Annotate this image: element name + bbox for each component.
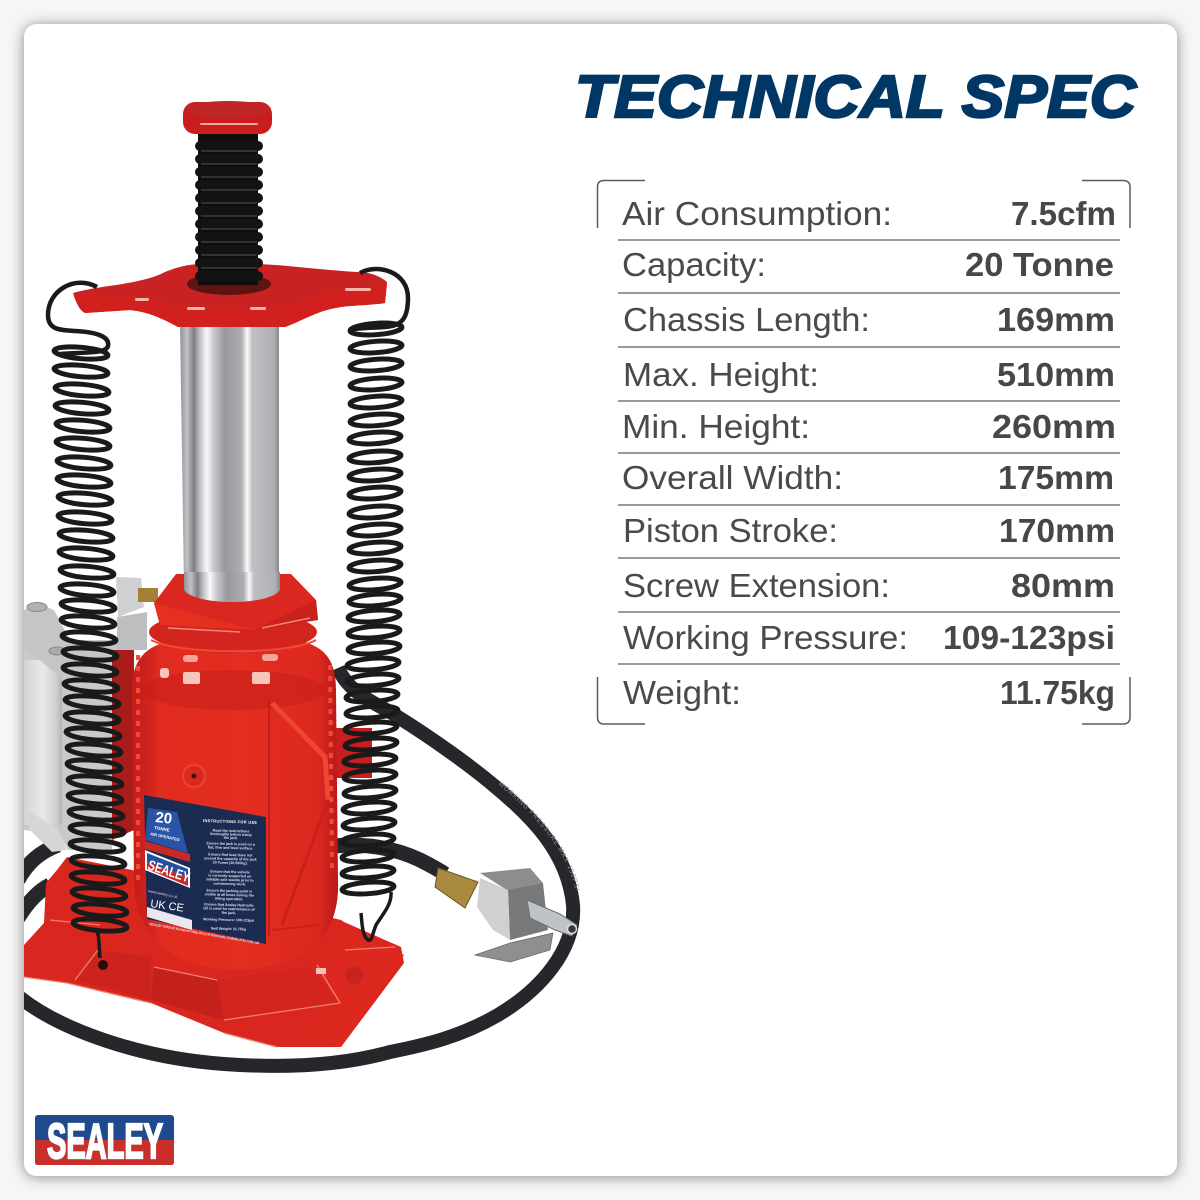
label instructions text: suitable axle stands prior to <box>206 877 254 883</box>
row: capacity <box>622 246 1114 283</box>
jack bottle body <box>132 640 338 970</box>
label instructions text: thoroughly before using <box>210 832 252 837</box>
release valve <box>183 765 205 787</box>
row: min height <box>622 408 1116 445</box>
row: max height: 510mm <box>997 356 1115 393</box>
label instructions text: the jack. <box>222 911 236 915</box>
air trigger valve <box>475 868 577 962</box>
row: overall width: Overall Width: <box>622 459 843 496</box>
label instructions text: Nett Weight: 11.75kg <box>211 927 246 931</box>
red top cap <box>183 101 272 134</box>
bottle neck collar <box>149 572 318 653</box>
row: air consumption: Air Consumption: <box>622 195 892 232</box>
title: TECHNICAL SPEC <box>575 64 1138 130</box>
label instructions text: Working Pressure: 109-123psi <box>203 917 254 923</box>
product photo: air bottle jack: WORKING PRESSURE MAX 150PSI <box>499 780 580 890</box>
row: chassis length: 169mm <box>997 301 1115 338</box>
chrome piston shaft <box>180 327 279 574</box>
table corner brackets <box>598 180 1130 724</box>
label instructions text: visible at all times during the <box>205 892 254 898</box>
jack base plate <box>24 857 404 1047</box>
bottle highlights <box>160 654 278 684</box>
label instructions text: the jack. <box>224 836 238 840</box>
label instructions text: Oil is used for maintenance of <box>203 906 255 912</box>
label instructions text: Read the instructions <box>213 829 249 833</box>
label instructions text: flat, firm and level surface. <box>208 845 253 851</box>
air hose inner loop <box>18 845 445 918</box>
row: piston stroke: 170mm <box>999 512 1115 549</box>
label instructions text: 20 Tonne (20,000kg). <box>213 861 248 865</box>
label instructions text: Ensure the jack is used on a <box>206 841 256 847</box>
row: capacity: Capacity: <box>622 246 766 283</box>
row: screw extension: Screw Extension: <box>623 567 890 604</box>
row: working pressure: 109-123psi <box>943 619 1115 656</box>
product label: UK CE <box>150 898 185 915</box>
yoke saddle <box>73 264 387 327</box>
product label: INSTRUCTIONS FOR USE <box>203 818 257 825</box>
red side tab <box>335 728 372 778</box>
row: weight <box>623 674 1115 711</box>
sealey logo: SEALEY <box>47 1115 163 1169</box>
bottle weld beads <box>138 655 332 935</box>
label instructions text <box>202 828 258 932</box>
product label: TONNE <box>154 825 170 833</box>
row dividers <box>618 240 1120 664</box>
row: chassis length: Chassis Length: <box>623 301 870 338</box>
label instructions text: Ensure the jacking point is <box>207 888 252 894</box>
product label: SEALEY <box>146 857 192 885</box>
right air coil <box>342 269 408 940</box>
row: weight: Weight: <box>623 674 741 711</box>
row: piston stroke: Piston Stroke: <box>623 512 838 549</box>
air motor cylinder <box>24 577 158 852</box>
product label: www.sealey.co.uk <box>148 889 178 899</box>
row: max height <box>623 356 1115 393</box>
sealey logo <box>35 1115 174 1169</box>
label instructions text: Ensure that Sealey Hydraulic <box>204 902 254 908</box>
label instructions text: is correctly supported on <box>208 873 251 879</box>
product label: AIR OPERATED <box>150 831 180 842</box>
threaded screw <box>195 133 263 285</box>
row: working pressure: Working Pressure: <box>623 619 908 656</box>
spec table <box>598 180 1130 724</box>
product label <box>144 795 266 946</box>
brass hose fitting <box>435 868 478 908</box>
row: screw extension: 80mm <box>1011 567 1115 604</box>
product label: SEALEY GROUP, Kempson Way, Bury St Edmunds, Suffolk, IP32 7AR, UK <box>149 922 260 946</box>
label instructions text: commencing work. <box>213 882 246 886</box>
label instructions text: Ensure that load does not <box>208 852 253 858</box>
row: max height: Max. Height: <box>623 356 819 393</box>
product label: 20 <box>155 809 173 828</box>
row: screw extension <box>623 567 1115 604</box>
air hose outer loop <box>18 668 573 1066</box>
label instructions text: lifting operation. <box>215 897 243 901</box>
row: min height: Min. Height: <box>622 408 810 445</box>
hose lettering <box>498 784 577 900</box>
label instructions text: exceed the capacity of the jack <box>204 856 257 862</box>
red frame behind spring <box>112 650 134 840</box>
row: air consumption: 7.5cfm <box>1011 195 1116 232</box>
row: piston stroke <box>623 512 1115 549</box>
row: working pressure <box>623 619 1115 656</box>
row: weight: 11.75kg <box>1000 674 1115 711</box>
row: chassis length <box>623 301 1115 338</box>
bottle shadow band <box>141 670 325 710</box>
row: overall width <box>622 459 1114 496</box>
label sealey badge <box>145 850 190 888</box>
label blue panel <box>145 808 188 853</box>
row: air consumption <box>622 195 1116 232</box>
product photo: air bottle jack <box>24 101 580 1073</box>
row: capacity: 20 Tonne <box>965 246 1114 283</box>
label instructions text: Ensure that the vehicle <box>210 869 250 875</box>
row: overall width: 175mm <box>998 459 1114 496</box>
row: min height: 260mm <box>992 408 1116 445</box>
left air coil <box>48 283 127 958</box>
